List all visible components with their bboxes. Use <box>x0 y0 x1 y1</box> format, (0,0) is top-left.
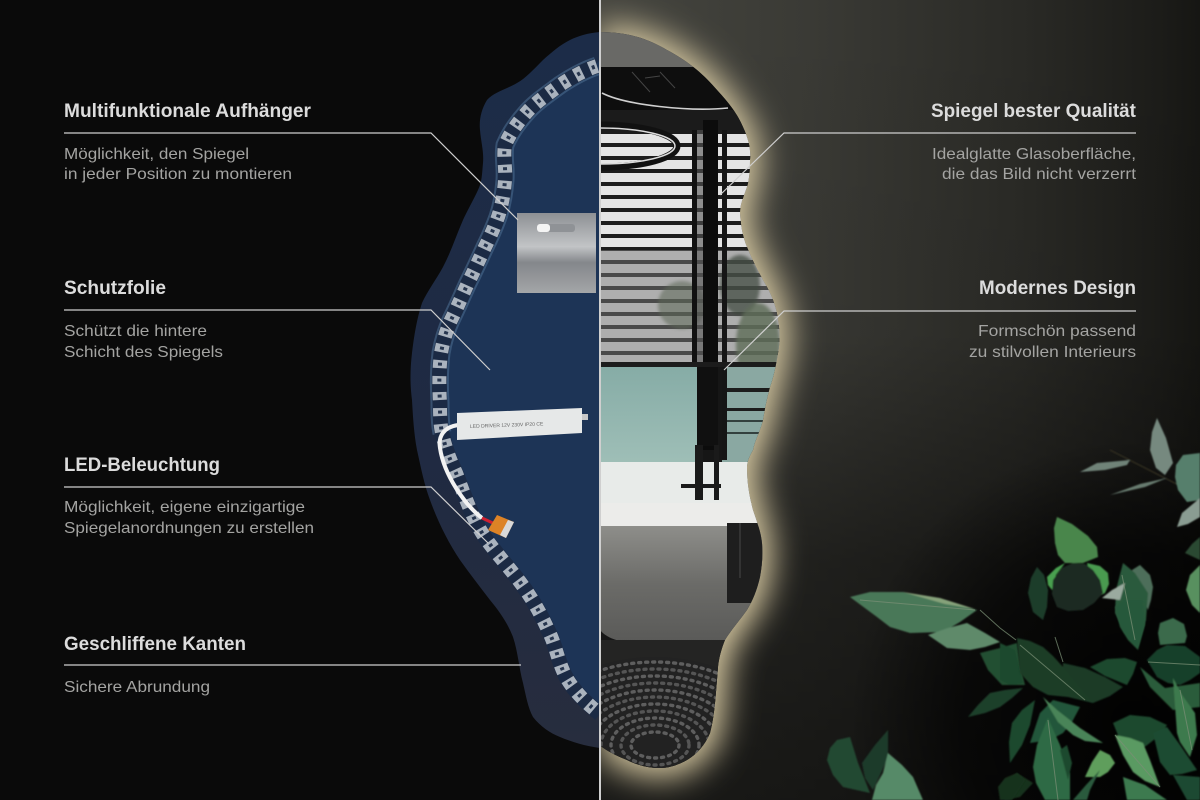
long left leaves <box>850 592 1025 717</box>
label: Geschliffene Kanten: Geschliffene Kanten <box>64 634 246 655</box>
label: Schutzfolie: Schutzfolie <box>64 278 166 299</box>
label: Modernes Design: Formschön passend <box>978 323 1136 340</box>
label: Geschliffene Kanten: Sichere Abrundung <box>64 679 210 696</box>
label: Spiegel bester Qualität: Idealglatte Glasoberfläche, <box>932 146 1136 163</box>
central eucalyptus cluster <box>1028 517 1187 647</box>
lower foliage cluster <box>1000 600 1200 800</box>
tree outside <box>656 253 780 363</box>
centre divider <box>599 0 601 800</box>
LED driver with wires and connectors <box>440 408 588 538</box>
upper right sprig <box>1080 418 1200 613</box>
ceiling panels <box>601 32 696 69</box>
label: Modernes Design <box>724 278 1136 370</box>
mirror back: blue protective film <box>441 60 600 712</box>
window blinds <box>600 130 790 365</box>
mirror front: bathroom reflection <box>601 32 780 768</box>
label: LED-Beleuchtung: Möglichkeit, eigene einzigartige <box>64 499 305 516</box>
sea view <box>601 367 697 462</box>
label: Multifunktionale Aufhänger <box>64 101 518 220</box>
mirror back: LED strip <box>439 66 600 714</box>
hanger plate <box>517 213 596 293</box>
label: LED-Beleuchtung: LED-Beleuchtung <box>64 455 220 476</box>
label: Multifunktionale Aufhänger: Möglichkeit, den Spiegel <box>64 146 249 163</box>
round woven rug <box>601 660 718 768</box>
label: Spiegel bester Qualität: die das Bild nicht verzerrt <box>942 166 1137 183</box>
bottom left leaves <box>827 730 1025 800</box>
label: Geschliffene Kanten <box>64 634 521 696</box>
label: LED-Beleuchtung <box>64 455 488 543</box>
right window lower pane <box>722 365 782 465</box>
floor <box>601 640 725 768</box>
label: Schutzfolie: Schützt die hintere <box>64 323 207 340</box>
label: Spiegel bester Qualität <box>720 101 1137 195</box>
plant: eucalyptus and laurel leaves <box>827 418 1200 800</box>
label: Schutzfolie <box>64 278 490 370</box>
dark window columns <box>600 120 790 460</box>
LED driver with wires and connectors: LED DRIVER 12V 230V IP20 CE <box>470 421 544 430</box>
black marble ceiling with lamp ring <box>600 67 740 111</box>
towel <box>727 523 763 603</box>
ceiling lamp ring <box>601 122 680 170</box>
background: right wall <box>600 0 1200 800</box>
label: Schutzfolie: Schicht des Spiegels <box>64 344 223 361</box>
mirror back: outer navy edge <box>410 32 600 748</box>
mirror glow <box>600 24 790 778</box>
bathtub rim <box>600 503 770 527</box>
faucet <box>681 445 721 500</box>
bathtub <box>600 526 770 642</box>
label: Modernes Design: Modernes Design <box>979 278 1136 299</box>
reflection base <box>600 30 790 775</box>
label: Modernes Design: zu stilvollen Interieurs <box>969 344 1136 361</box>
label: Multifunktionale Aufhänger: in jeder Position zu montieren <box>64 166 292 183</box>
bright sill <box>600 462 765 504</box>
leaf veins and stems <box>860 575 1200 800</box>
label: LED-Beleuchtung: Spiegelanordnungen zu erstellen <box>64 520 314 537</box>
background: left dark panel <box>0 0 600 800</box>
label: Multifunktionale Aufhänger: Multifunktionale Aufhänger <box>64 101 312 122</box>
label: Spiegel bester Qualität: Spiegel bester Qualität <box>931 101 1137 122</box>
